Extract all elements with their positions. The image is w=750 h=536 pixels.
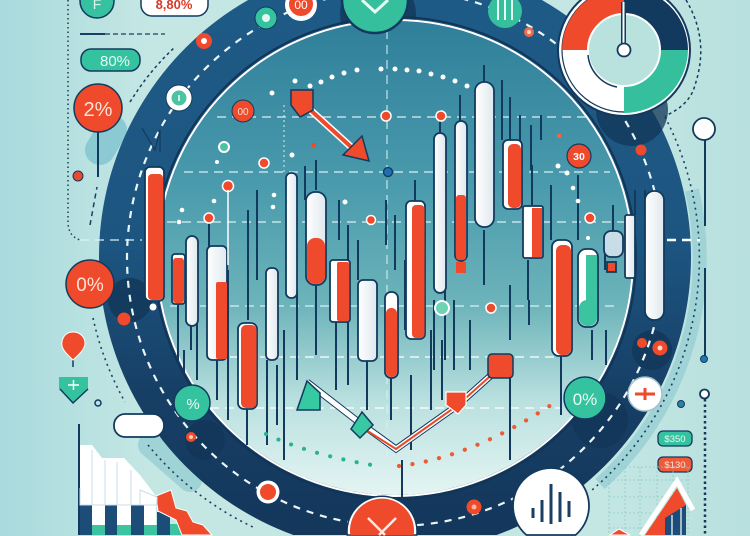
inner chart disc (158, 21, 632, 495)
gauge dial (588, 14, 660, 86)
bar chart bottom left (79, 424, 212, 535)
pill 80% (81, 49, 140, 71)
green 0% badge (564, 377, 606, 419)
badge 0% left (66, 260, 114, 308)
gauge dotted line (665, 0, 701, 116)
candle 13 (434, 133, 446, 293)
candle 16 (503, 140, 522, 209)
red dot on ring lower left (186, 432, 196, 442)
candlestick wicks (178, 65, 645, 515)
pill 8.80% (141, 0, 208, 16)
small red square (312, 143, 316, 147)
candle 9 (330, 260, 350, 322)
green marker (351, 412, 373, 438)
small orange square (557, 134, 561, 138)
grid panel bottom right (609, 467, 690, 535)
small chart dots (177, 66, 595, 315)
red pentagon marker (446, 392, 466, 414)
candle 8 (306, 192, 326, 285)
red dots ring left (118, 312, 130, 326)
candle 21 (607, 262, 616, 272)
balloon 2%: 2% (84, 99, 113, 121)
red dot right of gauge (636, 144, 646, 156)
white dot (150, 304, 156, 310)
gauge (557, 0, 691, 117)
candlesticks (145, 82, 664, 409)
green stripe circle (488, 0, 522, 28)
badge: 30 (567, 144, 591, 168)
ring white dashed track (127, 0, 663, 526)
trend line arrow (297, 354, 513, 449)
badge: small red 00: 00 (237, 107, 249, 118)
red ring node (204, 111, 595, 313)
white pin top right (693, 118, 715, 226)
inner disc outline (154, 17, 636, 499)
gauge needle (621, 2, 626, 44)
candle 4 (207, 246, 227, 360)
candle 18 (552, 240, 572, 356)
blue pin right (700, 268, 708, 362)
badge: green toggle (166, 85, 192, 111)
vertical white line (227, 190, 229, 265)
ring dark shadows (108, 0, 672, 460)
small blue node (384, 168, 392, 176)
top green icon partial (80, 0, 114, 18)
green dotted arc (266, 434, 378, 466)
red square marker (488, 354, 513, 378)
white stepped area (80, 445, 156, 535)
white ring node (219, 142, 229, 152)
candle 5 (238, 323, 257, 409)
red price label (658, 457, 692, 472)
check mark on ring (142, 128, 160, 152)
balloon 2% (74, 84, 122, 177)
big red x circle (347, 496, 417, 535)
red rising arrow chart (610, 481, 693, 535)
small dark ring (95, 400, 101, 406)
big green check circle (342, 0, 408, 33)
red ring dot bottom (256, 480, 280, 504)
ring pin right (700, 390, 709, 535)
candle 11 (385, 292, 398, 378)
gauge green segment (624, 50, 688, 113)
badge 0% left: 0% (76, 275, 104, 296)
green dot (255, 7, 277, 29)
candle 22 (625, 215, 635, 278)
white plus badge (628, 377, 662, 411)
candle 6 (266, 268, 278, 360)
green percent badge: % (186, 396, 200, 413)
red and white badge (285, 0, 317, 21)
outer dotted arcs (93, 117, 699, 528)
candle 23 (645, 191, 664, 320)
main ring (99, 0, 691, 535)
green node (435, 301, 449, 315)
badge: 30: 30 (573, 151, 585, 163)
soft shadows outside ring (100, 130, 700, 484)
green triangle (297, 381, 320, 410)
green 0% badge: 0% (573, 390, 597, 409)
candle 20 (604, 231, 623, 257)
candle 19 (578, 249, 598, 327)
bar icon circle (513, 468, 589, 535)
badge: small red 00 (232, 100, 254, 122)
small orange dot (524, 27, 534, 37)
blue small dot (678, 400, 684, 408)
red dotted arc (399, 405, 551, 466)
candle 7 (286, 173, 297, 298)
green shield plus (59, 377, 88, 403)
green bars (92, 524, 183, 535)
candle 17 (523, 206, 543, 258)
horizontal chart grid lines (80, 30, 700, 470)
left dotted frame (68, 0, 175, 240)
orange dot bottom (466, 500, 482, 514)
small red dot (73, 171, 83, 181)
red stepped bars (156, 490, 212, 535)
red down arrow (291, 90, 369, 161)
green percent badge (174, 385, 210, 421)
red map pin (62, 332, 85, 367)
red price label: $130 (664, 460, 686, 471)
green price label (658, 431, 692, 446)
navy bars (80, 505, 170, 535)
red dots lower right (637, 338, 668, 356)
red dot upper left (196, 33, 212, 49)
candle 12 (406, 201, 425, 339)
pill 80%: 80% (100, 53, 130, 70)
white pill (114, 414, 164, 437)
candle 3 (186, 236, 198, 326)
candle 15 (475, 82, 494, 227)
gauge navy segment (624, 0, 688, 50)
candle 1 (145, 167, 164, 301)
candle 14 (455, 121, 467, 273)
green price label: $350 (664, 434, 686, 445)
candle 10 (358, 280, 377, 361)
candle 2 (172, 254, 185, 304)
gauge red segment (562, 0, 624, 50)
